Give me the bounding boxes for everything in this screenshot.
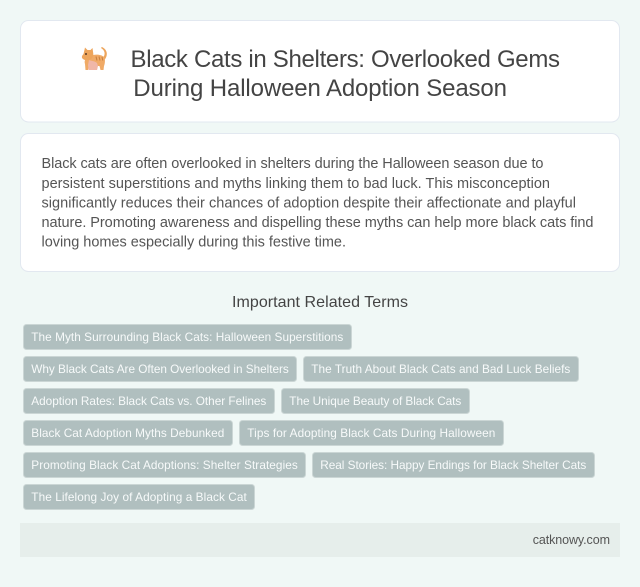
text block: description: persistent superstitions and myths linking them to bad luck. This misconception [42, 176, 550, 192]
panel: title card [20, 20, 620, 122]
tag [240, 420, 504, 446]
tag: Promoting Black Cat Adoptions: Shelter Strategies [31, 458, 298, 472]
footer [20, 523, 620, 557]
panel: intro paragraph [20, 134, 620, 272]
tag: Tips for Adopting Black Cats During Halloween [247, 426, 495, 440]
text block: description: significantly reduces their chances of adoption despite their affectionate and playful [42, 196, 576, 212]
heading: related terms: Important Related Terms [232, 294, 408, 311]
tag: Real Stories: Happy Endings for Black Shelter Cats [320, 458, 586, 472]
tag [24, 356, 296, 382]
tag [24, 452, 306, 478]
footer: catknowy.com [533, 533, 610, 547]
tag: The Unique Beauty of Black Cats [289, 394, 461, 408]
tag: The Truth About Black Cats and Bad Luck Beliefs [311, 362, 570, 376]
tag [24, 484, 254, 510]
text block: description: nature. Promoting awareness and dispelling these myths can help more black cats find [42, 215, 594, 231]
title: Black Cats in Shelters: Overlooked Gems [130, 46, 560, 73]
title [130, 46, 560, 102]
title: During Halloween Adoption Season [133, 75, 507, 102]
icon: cat [82, 47, 107, 70]
tag: Black Cat Adoption Myths Debunked [31, 426, 224, 440]
tag [24, 388, 274, 414]
tag: The Myth Surrounding Black Cats: Halloween Superstitions [31, 330, 343, 344]
tag [304, 356, 578, 382]
text block: description [42, 156, 594, 251]
text block: description: loving homes especially during this festive time. [42, 235, 346, 251]
tag: Adoption Rates: Black Cats vs. Other Felines [31, 394, 266, 408]
tag [282, 388, 470, 414]
tag: The Lifelong Joy of Adopting a Black Cat [31, 490, 248, 504]
text block: description: Black cats are often overlooked in shelters during the Halloween season due to [42, 156, 544, 172]
tag [24, 420, 232, 446]
panel: term tags [24, 324, 594, 510]
tag [312, 452, 594, 478]
tag [24, 324, 352, 350]
tag: Why Black Cats Are Often Overlooked in Shelters [31, 362, 289, 376]
